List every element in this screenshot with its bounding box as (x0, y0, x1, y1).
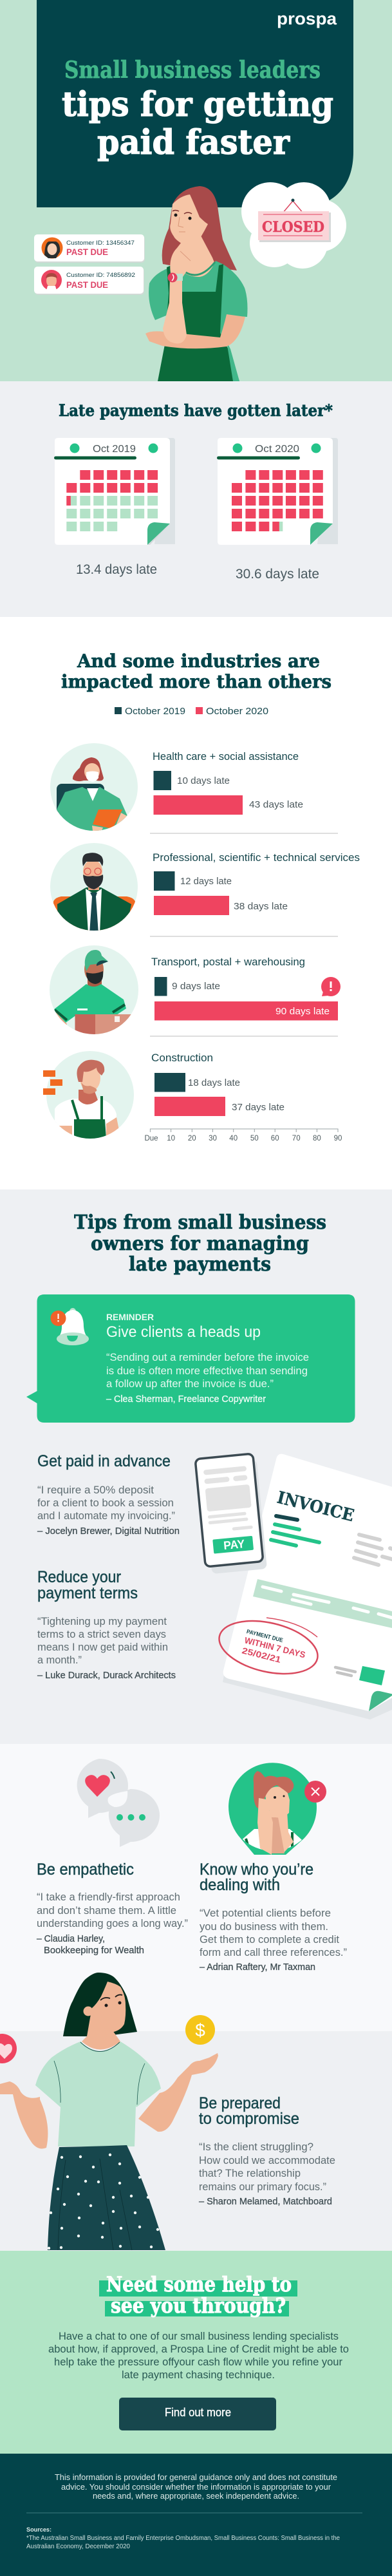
icon: heart (0, 2034, 17, 2063)
chart axis: 60 (271, 1135, 279, 1142)
category: professional services: 38 days late (234, 901, 288, 912)
illustration: invoice (214, 1454, 392, 1719)
category: transport: 9 days late (172, 981, 220, 992)
thought cloud: closed sign (241, 182, 346, 269)
callout: reminder: a follow up after the invoice is due.” (106, 1378, 274, 1390)
icon: alert bubble (321, 977, 341, 996)
tip: be prepared to compromise: – Sharon Melamed, Matchboard (199, 2196, 332, 2207)
disclaimer: needs and, where appropriate, seek independent advice. (93, 2491, 299, 2501)
heading with highlight: see you through? (111, 2293, 286, 2318)
panel: late payments (0, 381, 392, 617)
tip: reduce payment terms: payment terms (37, 1584, 138, 1602)
tip: get paid in advance: “I require a 50% deposit (37, 1484, 154, 1496)
category: health care: Health care + social assistance (153, 750, 299, 762)
tip: know who you're dealing with: dealing with (200, 1876, 280, 1894)
heading with highlight (99, 2272, 297, 2318)
disclaimer: This information is provided for general guidance only and does not constitute (55, 2472, 337, 2482)
category: transport: Transport, postal + warehousing (151, 956, 305, 968)
tip: be prepared to compromise: to compromise (199, 2110, 299, 2128)
tip: reduce payment terms: Reduce your (37, 1568, 121, 1586)
disclaimer (55, 2472, 337, 2501)
illustration: invoice: INVOICE (275, 1488, 356, 1526)
tip: reduce payment terms: “Tightening up my payment (37, 1615, 167, 1627)
chart axis (144, 1129, 342, 1142)
tip: be empathetic: – Claudia Harley, (37, 1933, 105, 1944)
shirt (149, 261, 247, 341)
customer card 1 (34, 234, 145, 263)
chart axis: 30 (209, 1135, 217, 1142)
tip: reduce payment terms: means I now get paid within (37, 1641, 168, 1653)
sources: Australian Economy, December 2020 (26, 2543, 130, 2550)
tip: be empathetic: and don’t shame them. A little (37, 1904, 176, 1917)
arms (145, 314, 245, 348)
sources: Sources: (26, 2526, 51, 2533)
category: professional services: Professional, scientific + technical services (153, 851, 360, 864)
panel: tips (0, 1189, 392, 1744)
illustration: professional (50, 843, 138, 934)
tip: be prepared to compromise: “Is the client struggling? (199, 2141, 313, 2153)
chart axis: 40 (229, 1135, 238, 1142)
title: paid faster (97, 123, 290, 162)
tip: be empathetic (37, 1861, 188, 1956)
calendar: Oct 2019 (54, 438, 175, 545)
callout: reminder: “Sending out a reminder before the invoice (106, 1351, 309, 1363)
tip: be empathetic: understanding goes a long way.” (37, 1917, 188, 1929)
heading (61, 650, 331, 692)
chart axis: 20 (188, 1135, 196, 1142)
category: construction: Construction (151, 1052, 213, 1064)
category: construction: 18 days late (188, 1077, 240, 1088)
arms (0, 2081, 48, 2148)
category: health care: 43 days late (249, 799, 303, 810)
body text: help take the pressure offyour cash flow while you refine your (54, 2356, 342, 2368)
tip: reduce payment terms: terms to a strict seven days (37, 1628, 166, 1640)
heading (74, 1211, 326, 1276)
customer card 1: PAST DUE (66, 247, 108, 257)
tip: know who you're dealing with: – Adrian Raftery, Mr Taxman (200, 1962, 315, 1973)
tip: be prepared to compromise: that? The relationship (199, 2167, 301, 2179)
illustration: invoice: WITHIN 7 DAYS (243, 1635, 306, 1660)
calendar: Oct 2020 (217, 438, 338, 545)
category: construction (151, 1052, 285, 1116)
tip: know who you're dealing with: “Vet potential clients before (200, 1907, 331, 1919)
illustration: woman balancing (0, 1973, 218, 2250)
customer card 2 (34, 267, 144, 295)
stat: 2019: 13.4 days late (76, 562, 157, 577)
panel: more tips (36, 1759, 346, 1972)
heading: late payments (129, 1253, 271, 1276)
category: professional services (153, 851, 360, 915)
tip: get paid in advance: – Jocelyn Brewer, Digital Nutrition (37, 1526, 180, 1537)
category: health care: 10 days late (177, 775, 230, 786)
title (62, 57, 333, 162)
tip: be empathetic: “I take a friendly-first approach (37, 1891, 180, 1903)
body text: late payment chasing technique. (122, 2369, 275, 2381)
heading with highlight: Need some help to (106, 2272, 292, 2297)
tip: reduce payment terms: a month.” (37, 1654, 82, 1666)
icon: coin (185, 2015, 215, 2045)
shirt (35, 2041, 161, 2146)
illustration: woman on phone (229, 1763, 326, 1864)
panel: industries (43, 653, 359, 1141)
heading: owners for managing (91, 1233, 309, 1255)
tip: know who you're dealing with (200, 1861, 347, 1973)
sources: *The Australian Small Business and Family Enterprise Ombudsman, Small Business Counts: Small Business in the (26, 2535, 340, 2542)
icon: speech bubbles (77, 1759, 160, 1847)
callout: reminder: Give clients a heads up (106, 1323, 261, 1341)
category: transport (151, 956, 341, 1020)
tip: be empathetic: Bookkeeping for Wealth (44, 1945, 144, 1956)
category: health care (153, 750, 303, 815)
illustration: construction worker (43, 1051, 134, 1143)
tip: be prepared to compromise (199, 2094, 335, 2207)
category: professional services: 12 days late (180, 876, 232, 887)
tip: get paid in advance: Get paid in advance (37, 1452, 171, 1470)
tip: get paid in advance (37, 1452, 180, 1537)
tip: be prepared to compromise: Be prepared (199, 2094, 281, 2112)
category: transport: 90 days late (275, 1006, 330, 1017)
callout: reminder (26, 1294, 355, 1423)
legend: October 2019 (125, 706, 185, 717)
button (119, 2398, 276, 2430)
panel: footer (0, 2454, 392, 2576)
illustration: invoice: 25/02/21 (241, 1645, 283, 1665)
chart axis: 90 (334, 1135, 342, 1142)
customer card 2: PAST DUE (66, 279, 108, 290)
icon: coin: $ (195, 2020, 205, 2040)
tip: be prepared to compromise: remains our primary focus.” (199, 2181, 326, 2193)
tip: know who you're dealing with: Know who you’re (200, 1861, 313, 1879)
illustration: phone (195, 1454, 267, 1575)
thought cloud: closed sign: CLOSED (262, 219, 324, 236)
calendar: Oct 2020: Oct 2020 (255, 444, 299, 455)
customer card 1: Customer ID: 13456347 (66, 240, 135, 247)
tip: reduce payment terms (37, 1568, 176, 1681)
tip: reduce payment terms: – Luke Durack, Durack Architects (37, 1670, 176, 1681)
tip: get paid in advance: and I automate my invoicing.” (37, 1510, 175, 1522)
body text: Have a chat to one of our small business lending specialists (59, 2330, 339, 2342)
heading: impacted more than others (61, 671, 331, 692)
tip: know who you're dealing with: Get them to complete a credit (200, 1933, 339, 1946)
heading: Tips from small business (74, 1211, 326, 1234)
panel: compromise (0, 1973, 392, 2251)
category: construction: 37 days late (232, 1102, 285, 1113)
apron (158, 264, 239, 381)
chart axis: 80 (313, 1135, 321, 1142)
illustration: invoice: PAYMENT DUE (246, 1628, 284, 1643)
calendar: Oct 2019: Oct 2019 (93, 444, 136, 455)
chart axis: Due (144, 1135, 158, 1142)
button: Find out more (165, 2406, 231, 2419)
legend (115, 706, 268, 717)
stat: 2020: 30.6 days late (236, 567, 319, 582)
title: tips for getting (62, 85, 333, 124)
panel: header (0, 0, 392, 381)
tip: know who you're dealing with: form and call three references.” (200, 1946, 347, 1958)
panel: call to action (0, 2251, 392, 2454)
chart axis: 70 (292, 1135, 301, 1142)
chart axis: 10 (167, 1135, 175, 1142)
tip: know who you're dealing with: you do business with them. (200, 1920, 328, 1933)
legend: October 2020 (206, 706, 268, 717)
title: Small business leaders (64, 57, 321, 84)
header dark block (37, 0, 353, 207)
illustration: transport worker (50, 945, 138, 1037)
tip: get paid in advance: for a client to book a session (37, 1497, 174, 1509)
heading: And some industries are (77, 650, 320, 672)
disclaimer: advice. You should consider whether the information is appropriate to your (61, 2482, 331, 2492)
sources (26, 2526, 340, 2550)
body text (48, 2330, 349, 2381)
illustration: phone: PAY (223, 1537, 245, 1552)
bricks (43, 1070, 62, 1095)
logo: prospa (277, 9, 337, 28)
body text: about how, if approved, a Prospa Line of Credit might be able to (48, 2343, 349, 2355)
icon: bell (50, 1308, 89, 1345)
skirt (48, 2145, 165, 2250)
chart axis: 50 (250, 1135, 259, 1142)
callout: reminder: – Clea Sherman, Freelance Copywriter (106, 1394, 266, 1405)
tip: be prepared to compromise: How could we accommodate (199, 2154, 335, 2166)
tip: be empathetic: Be empathetic (37, 1861, 134, 1879)
illustration: health care worker (50, 743, 138, 834)
customer card 2: Customer ID: 74856892 (66, 272, 135, 279)
callout: reminder: REMINDER (106, 1312, 154, 1322)
heading: Late payments have gotten later* (59, 401, 333, 420)
illustration: worried shop owner (145, 186, 247, 381)
callout: reminder: is due is often more effective than sending (106, 1365, 308, 1377)
